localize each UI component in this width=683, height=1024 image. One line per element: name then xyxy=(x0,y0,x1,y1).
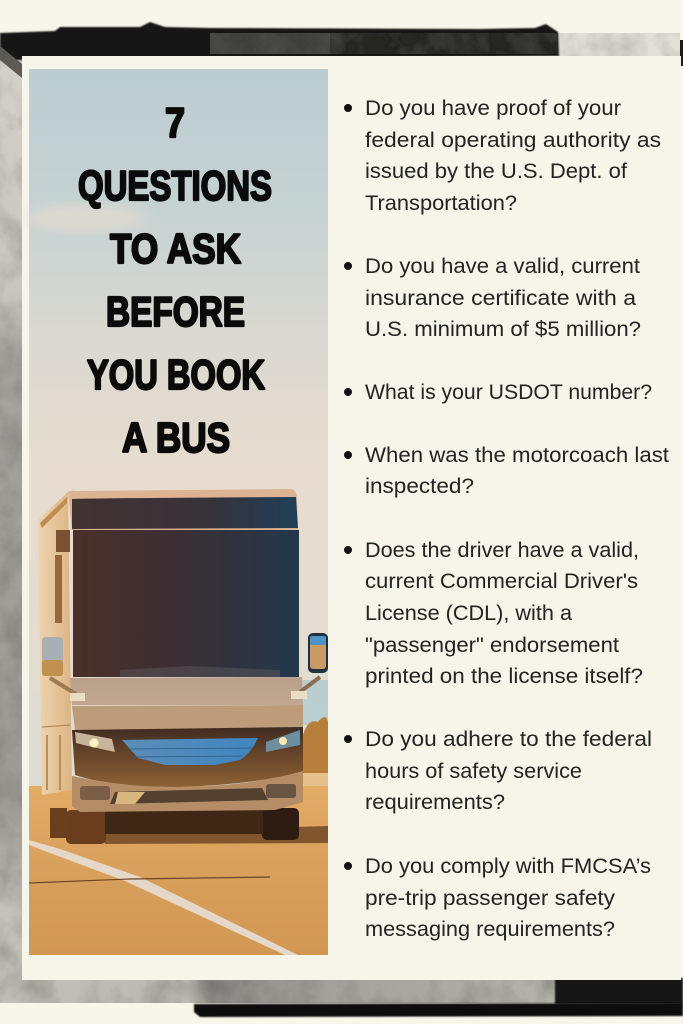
question 2: Do you have a valid, current xyxy=(365,255,640,278)
bus side xyxy=(38,492,72,795)
question 1: issued by the U.S. Dept. of xyxy=(365,160,627,183)
question 5: "passenger" endorsement xyxy=(365,634,619,657)
question 2 xyxy=(344,255,641,341)
bumper xyxy=(72,771,303,812)
question 4: inspected? xyxy=(365,475,474,498)
question 5: printed on the license itself? xyxy=(365,665,643,688)
question 4: When was the motorcoach last xyxy=(365,444,669,467)
question 2: insurance certificate with a xyxy=(365,287,636,310)
sky xyxy=(29,69,328,789)
question 1: Transportation? xyxy=(365,192,517,215)
title: BEFORE xyxy=(106,288,245,335)
bus wheels xyxy=(50,808,67,838)
bush xyxy=(303,717,328,775)
title xyxy=(78,99,272,461)
question 5 xyxy=(344,539,643,688)
grille xyxy=(122,738,258,765)
question 5: Does the driver have a valid, xyxy=(365,539,639,562)
question 1 xyxy=(344,97,661,215)
road shadow xyxy=(100,826,328,844)
title: QUESTIONS xyxy=(78,162,272,209)
question 4 xyxy=(344,444,669,498)
question 6: hours of safety service xyxy=(365,760,582,783)
title: TO ASK xyxy=(110,225,241,272)
question 7: pre-trip passenger safety xyxy=(365,887,616,910)
front band xyxy=(72,727,303,787)
bus visor xyxy=(72,497,298,529)
question 1: federal operating authority as xyxy=(365,129,661,152)
title: A BUS xyxy=(122,414,230,461)
question 6: Do you adhere to the federal xyxy=(365,728,652,751)
panel: bus photo xyxy=(25,69,328,955)
title: 7 xyxy=(165,99,185,146)
question 5: current Commercial Driver's xyxy=(365,570,638,593)
question 2: U.S. minimum of $5 million? xyxy=(365,318,641,341)
question 5: License (CDL), with a xyxy=(365,602,572,625)
question 1: Do you have proof of your xyxy=(365,97,621,120)
question 6 xyxy=(344,728,652,814)
title: YOU BOOK xyxy=(87,351,265,398)
mirrors xyxy=(42,637,63,676)
question 7: Do you comply with FMCSA’s xyxy=(365,855,651,878)
question 7: messaging requirements? xyxy=(365,918,615,941)
windshield xyxy=(73,530,299,677)
road line xyxy=(29,840,298,955)
question 7 xyxy=(344,855,651,941)
question 6: requirements? xyxy=(365,791,505,814)
lower cap panel xyxy=(70,677,303,705)
road xyxy=(29,786,328,955)
question 3: What is your USDOT number? xyxy=(365,381,652,404)
road crack xyxy=(29,877,270,883)
bus roof cap xyxy=(68,489,298,530)
headlights xyxy=(75,732,115,752)
